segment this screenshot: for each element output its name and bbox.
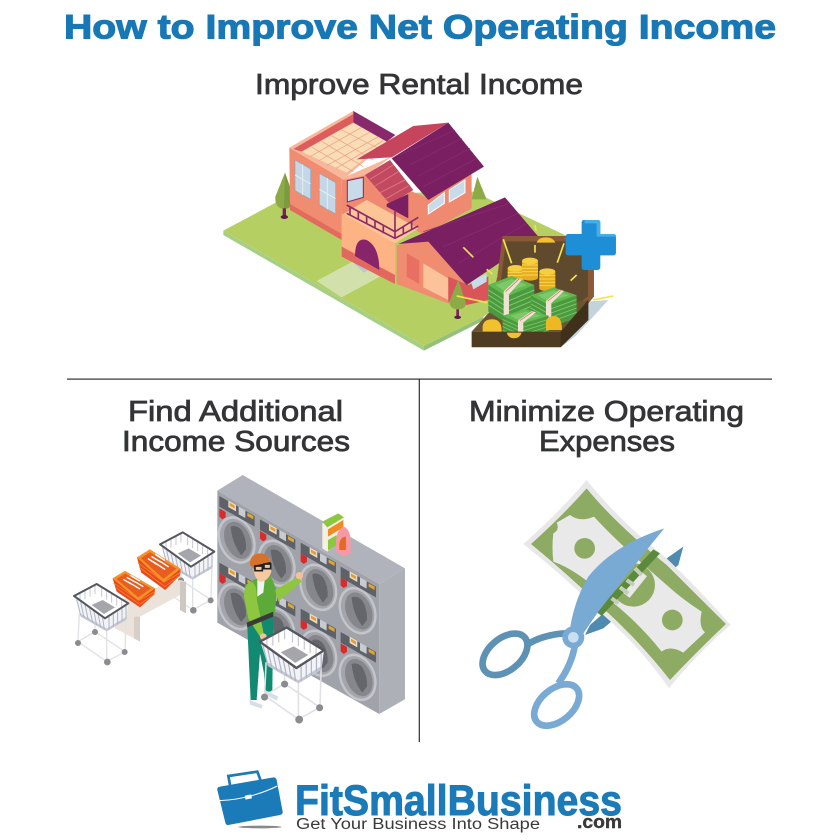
logo wordmark: FitSmallBusiness (295, 777, 622, 825)
table with baskets (113, 549, 186, 642)
logo tagline: Get Your Business Into Shape (296, 816, 540, 833)
tree left (275, 173, 293, 219)
divider: vertical (419, 379, 420, 742)
heading: Find Additional Income Sources (122, 396, 350, 458)
illustration: scissors cutting a dollar bill (475, 480, 731, 734)
heading: Improve Rental Income: Improve Rental Income (255, 69, 583, 101)
illustration: house with money briefcase (223, 111, 616, 351)
heading: Find Additional Income Sources: Find Additional (128, 396, 343, 428)
tree front (449, 280, 466, 319)
icon: plus sign (566, 220, 616, 270)
heading: Find Additional Income Sources: Income Sources (122, 426, 350, 458)
back blade (585, 547, 683, 635)
tree back (472, 177, 487, 199)
washing machines (211, 475, 405, 714)
logo .com: .com (577, 812, 622, 832)
heading: Minimize Operating Expenses (469, 396, 744, 458)
handle light (526, 645, 587, 734)
balcony and entrance (342, 200, 418, 284)
detergent (322, 513, 351, 557)
divider: horizontal (67, 378, 772, 380)
logo briefcase icon (217, 772, 283, 828)
cart left (74, 584, 128, 665)
heading: Minimize Operating Expenses: Minimize Operating (469, 396, 744, 428)
upper wing and roof (342, 123, 484, 235)
cart front (260, 628, 324, 723)
lawn (223, 192, 568, 351)
front blade (569, 528, 664, 633)
briefcase with coins and cash (457, 225, 613, 347)
title: How to Improve Net Operating Income (64, 8, 776, 46)
cart back (160, 532, 214, 614)
handle dark (475, 625, 565, 683)
pivot (562, 626, 584, 648)
illustration: laundromat (74, 475, 405, 723)
dollar bill (523, 480, 731, 688)
man with shopping cart (244, 553, 303, 709)
heading: Minimize Operating Expenses: Expenses (539, 426, 675, 458)
logo: Fit Small Business (217, 772, 622, 833)
garage (397, 197, 538, 305)
house left block (289, 111, 410, 240)
